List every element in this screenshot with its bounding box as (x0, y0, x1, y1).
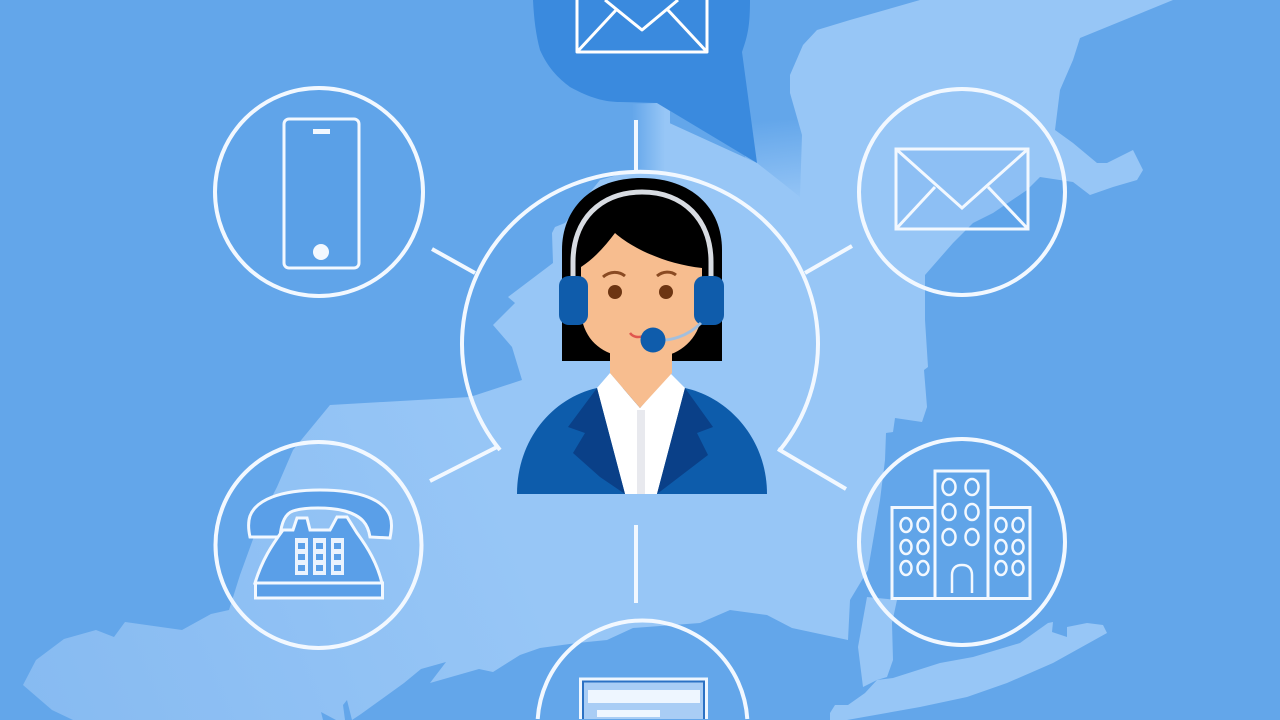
icon: desk telephone in circle (216, 442, 422, 648)
customer support agent (517, 178, 767, 494)
agent neck (610, 350, 672, 408)
icon: envelope in bubble (577, 0, 707, 52)
agent jacket (517, 388, 767, 494)
telephone keypad (295, 538, 344, 575)
telephone foot (256, 583, 382, 598)
eyebrows (603, 272, 676, 277)
icon: smartphone in circle (215, 88, 423, 296)
icon: website screen in circle (538, 620, 747, 719)
smile (630, 333, 643, 337)
telephone base (255, 517, 382, 583)
icon: office buildings in circle (859, 439, 1065, 645)
agent shirt (597, 373, 685, 494)
headband (573, 192, 711, 280)
speech bubble with envelope (533, 0, 757, 163)
agent lapels (568, 388, 625, 494)
connector spokes (430, 120, 852, 603)
central arc around agent (462, 172, 818, 450)
telephone handset (248, 490, 392, 538)
microphone (640, 328, 666, 352)
agent hair (562, 178, 722, 361)
microphone boom (653, 323, 701, 340)
agent face (581, 233, 702, 357)
icon: envelope in circle (859, 89, 1065, 295)
eyes (608, 285, 673, 299)
headset earpieces (559, 276, 724, 325)
